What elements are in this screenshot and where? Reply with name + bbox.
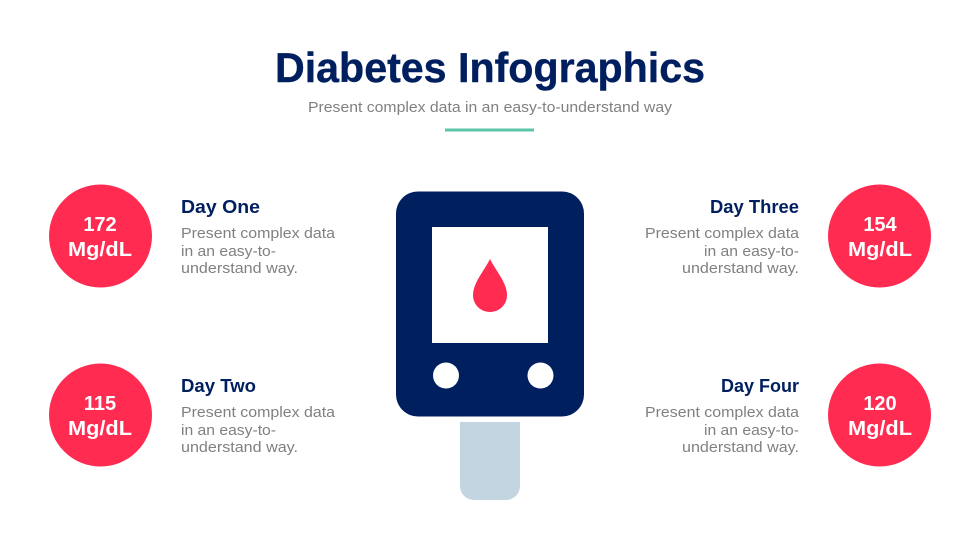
- panel: day four: [645, 364, 931, 466]
- text block: day four: in an easy-to-: [704, 423, 799, 439]
- icon: glucose meter: [396, 192, 584, 500]
- badge: 120 Mg/dL: 120: [863, 393, 897, 415]
- heading: day two: Day Two: [181, 376, 256, 396]
- badge: 115 Mg/dL: Mg/dL: [68, 418, 132, 440]
- badge: 120 Mg/dL: [828, 364, 931, 466]
- text block: day three: [645, 226, 800, 277]
- text block: day four: Present complex data: [645, 405, 800, 421]
- badge: 172 Mg/dL: Mg/dL: [68, 239, 132, 261]
- heading: day three: Day Three: [710, 197, 799, 217]
- text block: day three: in an easy-to-: [704, 244, 799, 260]
- text block: day two: understand way.: [181, 440, 298, 456]
- badge: 154 Mg/dL: [828, 184, 931, 288]
- test strip: [460, 422, 520, 500]
- title: Diabetes Infographics: [275, 44, 705, 91]
- badge: 115 Mg/dL: 115: [84, 393, 116, 415]
- text block: day two: Present complex data: [181, 405, 336, 421]
- heading: day four: Day Four: [721, 376, 799, 396]
- accent underline: [445, 128, 534, 132]
- text block: day four: understand way.: [682, 440, 799, 456]
- badge: 172 Mg/dL: [49, 184, 152, 288]
- panel: day one: [49, 184, 336, 288]
- text block: day one: Present complex data: [181, 226, 336, 242]
- panel: day three: [645, 184, 931, 288]
- text block: day two: in an easy-to-: [181, 423, 276, 439]
- text block: day three: understand way.: [682, 261, 799, 277]
- meter button right: [528, 362, 554, 388]
- badge: 172 Mg/dL: 172: [83, 214, 117, 236]
- text block: day four: [645, 405, 800, 456]
- text block: day one: in an easy-to-: [181, 244, 276, 260]
- text block: day three: Present complex data: [645, 226, 800, 242]
- badge: 115 Mg/dL: [49, 364, 152, 466]
- heading: day one: Day One: [181, 197, 260, 217]
- subtitle: Present complex data in an easy-to-understand way: [308, 99, 673, 116]
- meter body: [396, 192, 584, 416]
- meter button left: [433, 362, 459, 388]
- icon: blood drop: [473, 259, 507, 312]
- text block: day one: understand way.: [181, 261, 298, 277]
- text block: day two: [181, 405, 336, 456]
- panel: day two: [49, 364, 336, 466]
- badge: 154 Mg/dL: Mg/dL: [848, 239, 912, 261]
- badge: 120 Mg/dL: Mg/dL: [848, 418, 912, 440]
- text block: day one: [181, 226, 336, 277]
- badge: 154 Mg/dL: 154: [863, 214, 898, 236]
- meter screen: [432, 227, 548, 343]
